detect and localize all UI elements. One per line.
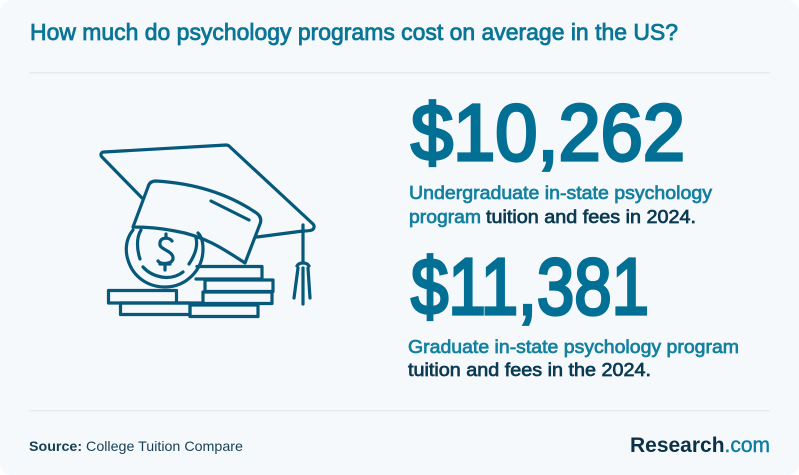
- coin with dollar sign: [126, 230, 203, 287]
- mortarboard: [101, 145, 314, 237]
- title: How much do psychology programs cost on average in the US?: [30, 19, 678, 45]
- stat: undergraduate description: program: [409, 206, 481, 227]
- tassel: [294, 225, 310, 304]
- stat: undergraduate amount: $10,262: [411, 88, 685, 177]
- stat: undergraduate description: tuition and fees in 2024.: [486, 206, 696, 227]
- icon: graduation cap on coins: [101, 145, 314, 316]
- stat: graduate description: [408, 336, 739, 380]
- stat: graduate description: tuition and fees in the 2024.: [408, 359, 651, 380]
- cap skull: [133, 181, 261, 263]
- coin stacks: [108, 266, 273, 316]
- stat: graduate description: Graduate in-state psychology program: [408, 336, 739, 357]
- stat: undergraduate description: Undergraduate in-state psychology: [409, 182, 713, 203]
- stat: graduate amount: $11,381: [411, 242, 649, 331]
- stat: undergraduate description: [409, 182, 713, 227]
- logo: Research.com: Research.com: [630, 434, 770, 457]
- source: Source: College Tuition Compare: [29, 438, 243, 454]
- cap highlight: [211, 201, 249, 220]
